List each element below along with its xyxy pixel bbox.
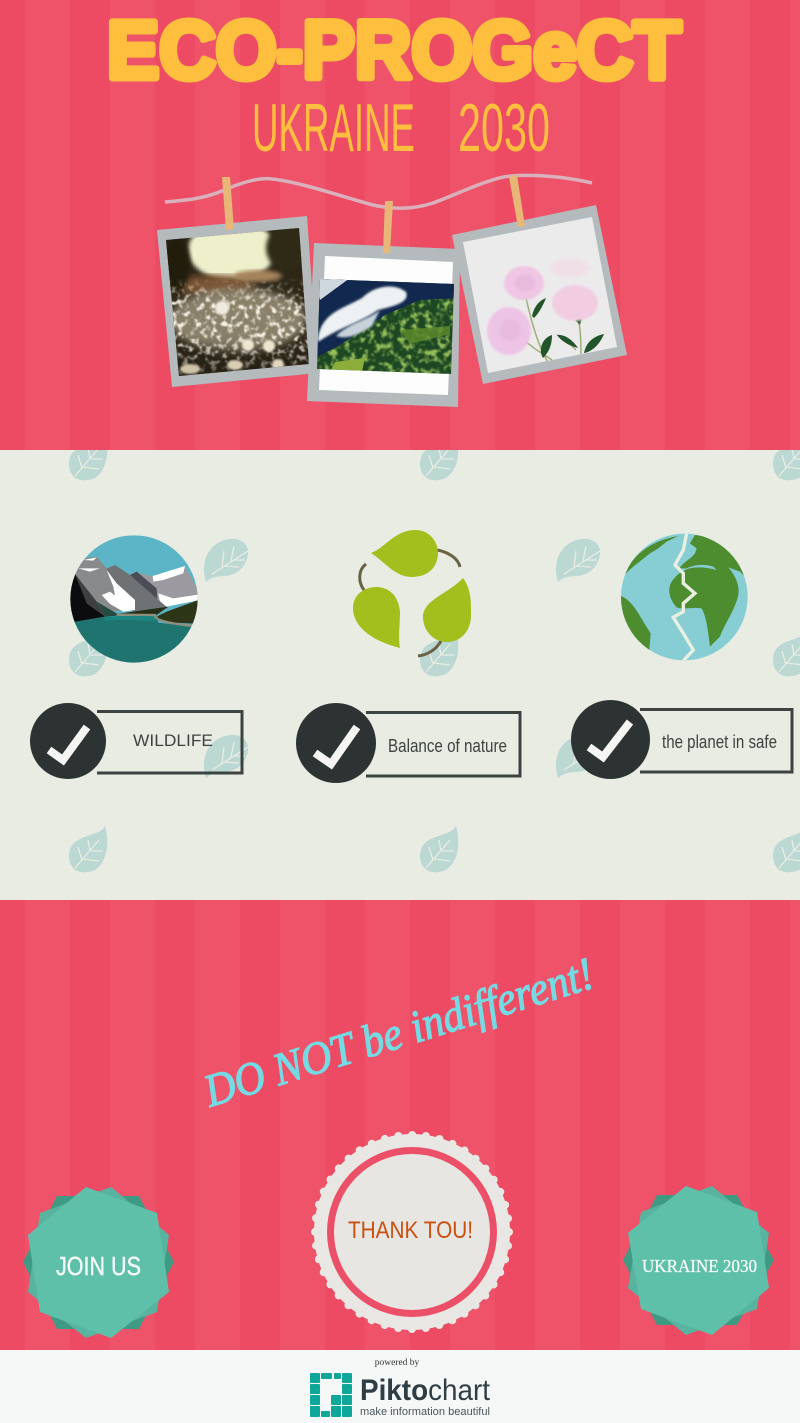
wordmark: Piktochart [360,1374,491,1407]
check badge [30,703,106,779]
badge: THANK TOU!: THANK TOU! [348,1217,473,1244]
checklist item: WILDLIFE [30,703,242,779]
powered by: powered by [375,1358,420,1368]
bottom red striped panel [0,900,800,1350]
clothes pegs [222,175,525,253]
middle band background with leaf pattern [0,434,800,900]
icon: cracked globe [617,532,753,662]
tagline: make information beautiful [360,1406,490,1418]
badge: THANK TOU! [314,1134,510,1330]
badge: JOIN US: JOIN US [56,1251,141,1281]
icon: three green leaves recycle [353,530,471,656]
check badge [571,700,650,779]
check badge [296,703,376,783]
badge: JOIN US [23,1187,174,1338]
check mark [589,722,630,757]
title: ECO-PROGeCT: ECO-PROGeCT [107,5,681,96]
label: Balance of nature [388,736,507,756]
leaf left [353,587,400,648]
top red striped panel [0,0,800,450]
checklist item: Balance of nature [296,703,520,783]
photo: green mountain with clouds [307,243,460,407]
photo: white flower field [157,216,318,387]
badge: UKRAINE 2030 [623,1186,774,1335]
check mark [49,727,87,760]
slogan: DO NOT be indifferent!: DO NOT be indifferent! [197,947,600,1117]
label: WILDLIFE [133,731,213,750]
label: the planet in safe [662,732,777,752]
checklist item: the planet in safe [571,700,792,779]
subtitle: UKRAINE 2030: 2030 [458,90,550,166]
check mark [315,727,357,764]
logo mark [310,1373,352,1417]
leaf top [371,530,438,577]
badge: UKRAINE 2030: UKRAINE 2030 [642,1256,757,1276]
hanging photos on a rope [157,175,627,407]
icon: mountain lake circle [70,535,198,663]
footer: powered by Piktochart [0,1350,800,1423]
subtitle: UKRAINE 2030: UKRAINE [252,90,415,166]
rope [165,175,592,208]
stems [360,550,460,656]
photo: pink peonies [452,205,627,384]
leaf right [423,578,471,642]
